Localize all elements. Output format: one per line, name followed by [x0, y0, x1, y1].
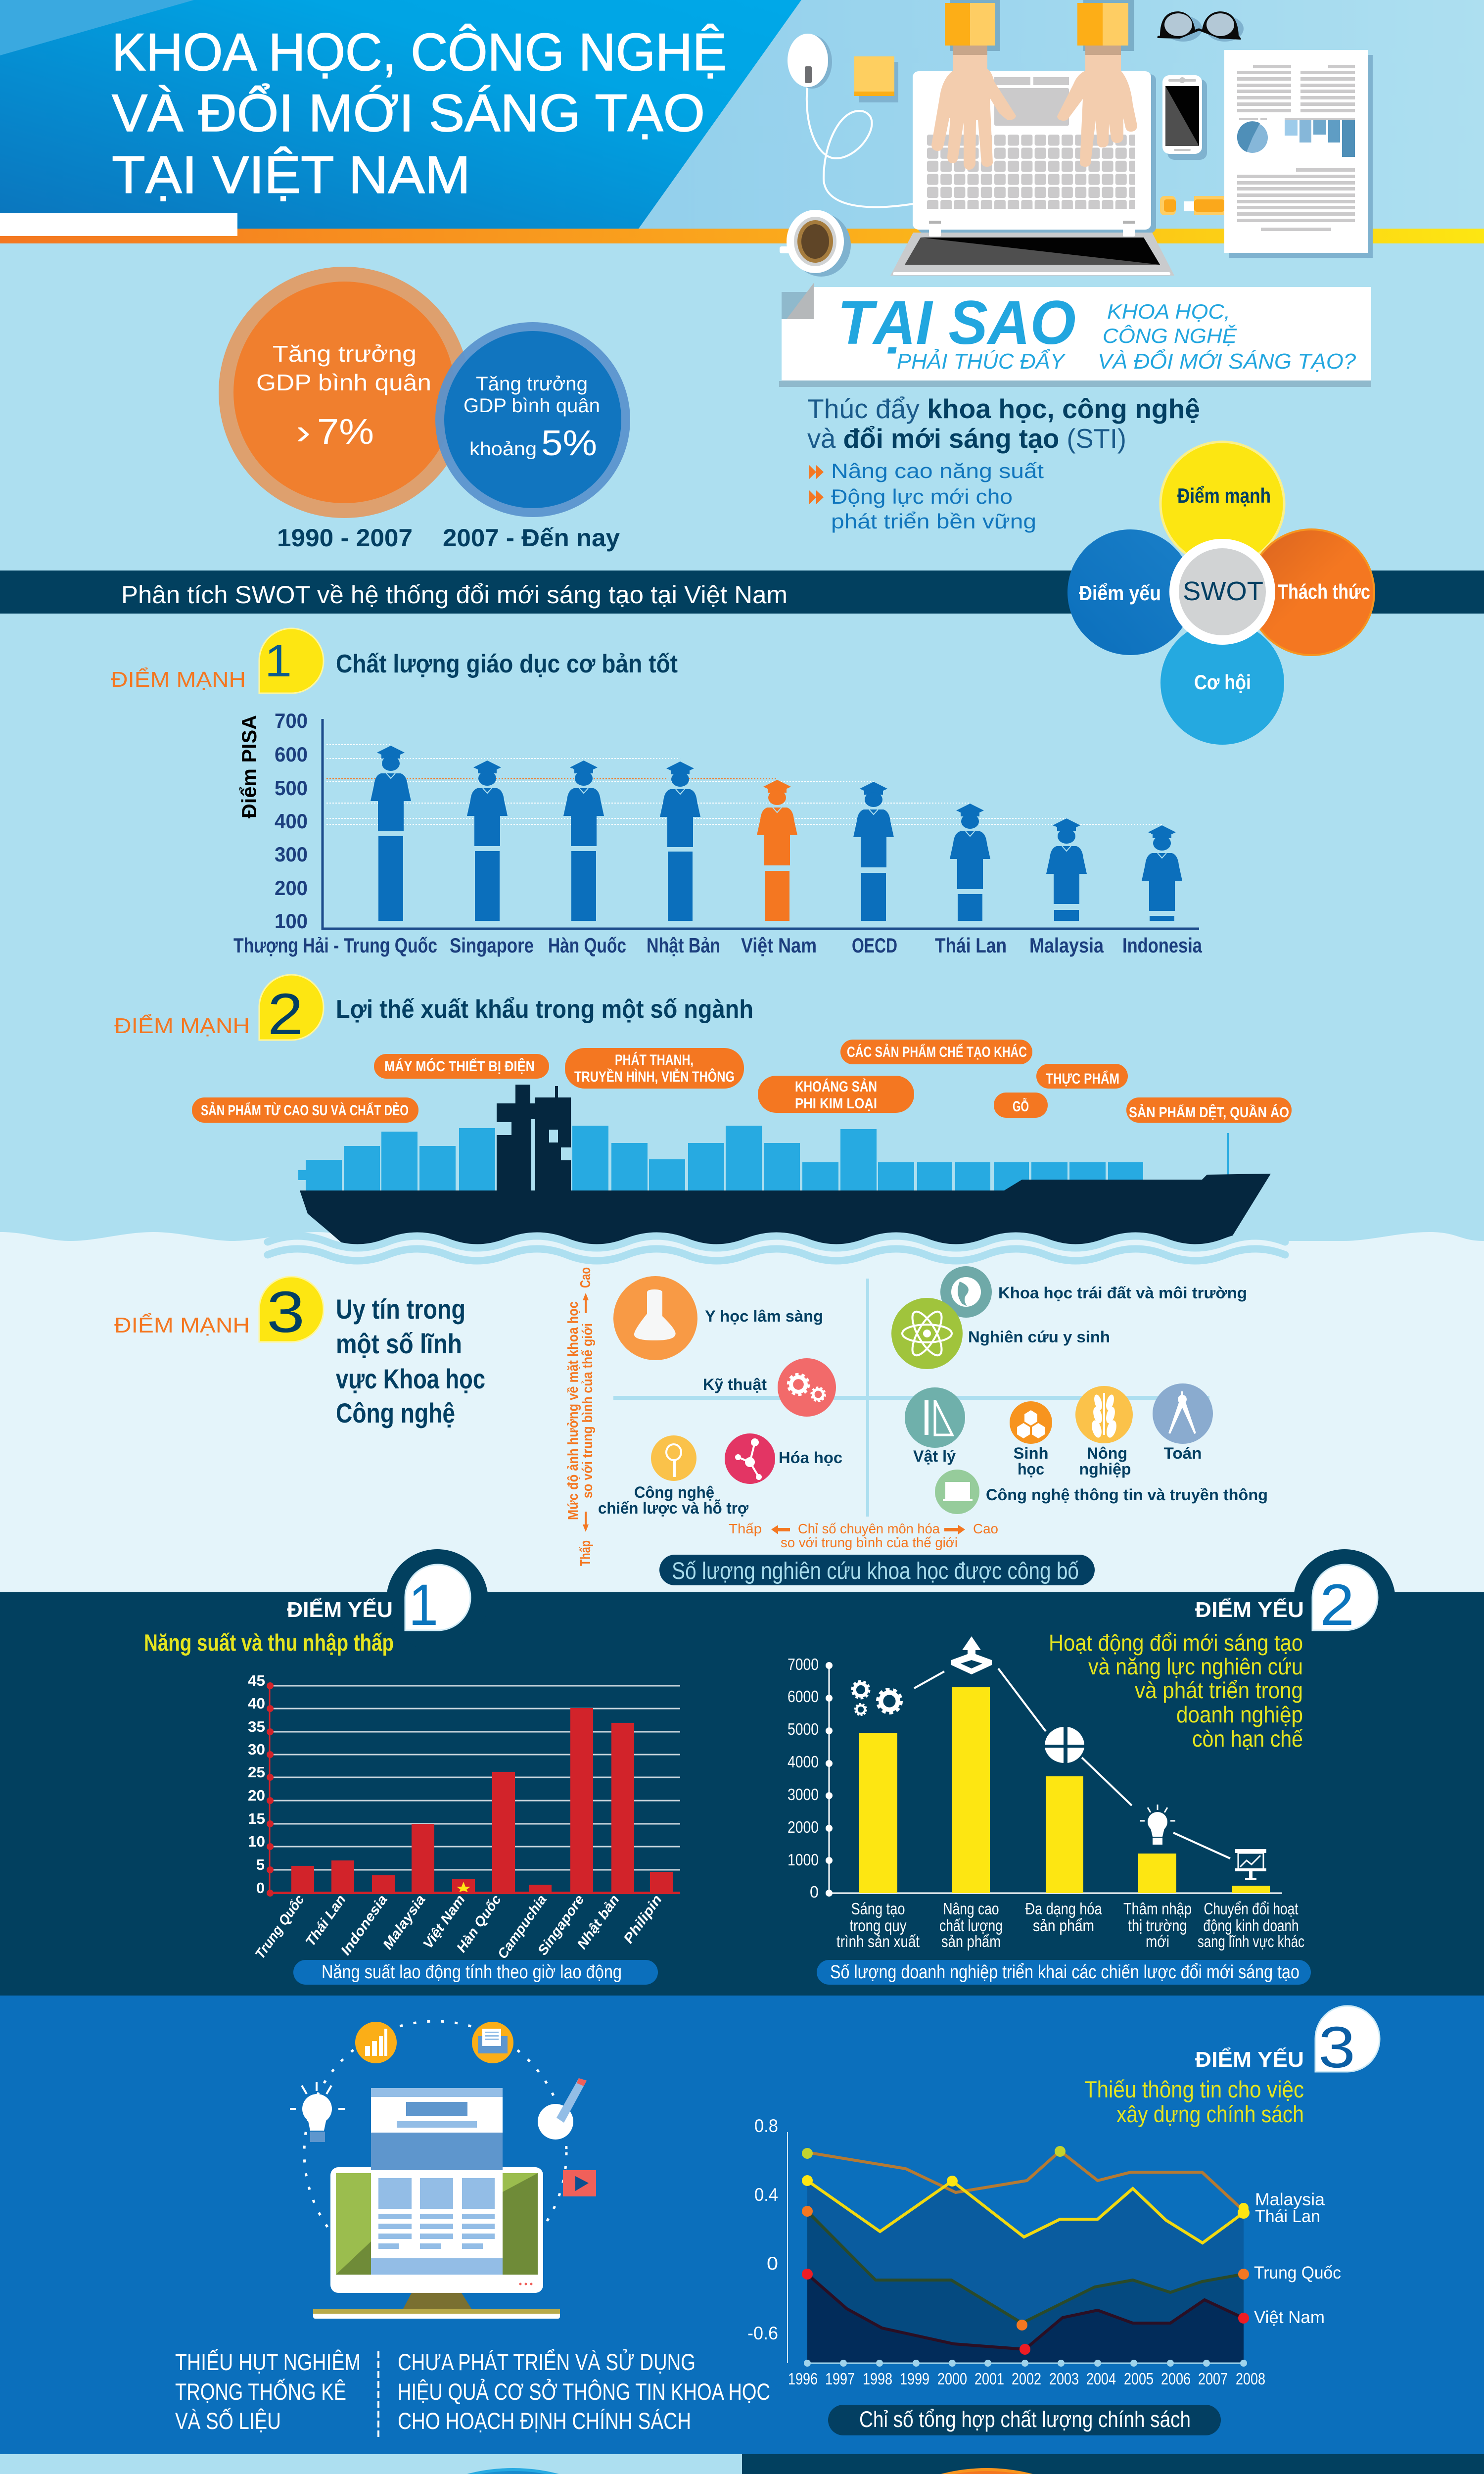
y axis labels: 400 — [275, 809, 308, 833]
badge: weakness 1: ĐIỂM YẾU — [287, 1597, 393, 1622]
list: STI benefits: Động lực mới cho — [831, 485, 1013, 508]
icon: play button — [563, 2170, 596, 2196]
left hand — [931, 3, 1016, 170]
x axis labels: Indonesia — [1122, 934, 1203, 957]
item: physics — [905, 1387, 965, 1465]
icon: light bulb — [290, 2082, 345, 2142]
y axis labels: 5000 — [788, 1720, 819, 1738]
vertical axis label: Mức độ ảnh hưởng về mặt khoa học — [565, 1301, 581, 1520]
x axis labels: Chuyển đổi hoạt — [1204, 1900, 1298, 1918]
badge: weakness 3: ĐIỂM YẾU — [1195, 2046, 1304, 2072]
series labels: Trung Quốc — [1254, 2263, 1341, 2283]
y axis labels: 7000 — [788, 1655, 819, 1673]
quadrant axes — [613, 1396, 1209, 1400]
x axis labels: Nhật bản — [574, 1892, 622, 1952]
water waves — [268, 1236, 1285, 1261]
icon: computer mouse and cord — [788, 34, 913, 207]
line: Thailand — [807, 2181, 1244, 2243]
item: chemistry: Hóa học — [779, 1449, 842, 1467]
x axis labels: trình sản xuất — [836, 1932, 920, 1951]
icon: pie chart — [1045, 1727, 1084, 1763]
data markers — [802, 2146, 1250, 2355]
title: VÀ ĐỔI MỚI SÁNG TẠO — [112, 83, 705, 143]
icon: hands on keyboard — [931, 0, 1137, 170]
circle: GDP 2007 to now: 5% — [541, 424, 597, 463]
item: clinical medicine: Y học lâm sàng — [705, 1307, 823, 1325]
callout: why box: CÔNG NGHỆ — [1103, 324, 1237, 347]
horizontal axis label: Chỉ số chuyên môn hóa — [798, 1521, 940, 1536]
chart: research quadrant — [565, 1266, 1268, 1585]
x axis labels: Campuchia — [494, 1892, 550, 1961]
icon: sticky note — [854, 56, 898, 102]
axes — [829, 1663, 1282, 1893]
circle: GDP 1990-2007: › — [296, 412, 311, 452]
text block: weak statistics: TRỌNG THỐNG KÊ — [175, 2379, 346, 2405]
callouts: export sectors: MÁY MÓC THIẾT BỊ ĐIỆN — [384, 1058, 535, 1075]
item: agriculture — [1075, 1386, 1133, 1478]
x axis labels: 2004 — [1086, 2370, 1116, 2388]
item: strategic technology: Công nghệ — [634, 1483, 714, 1501]
circle: GDP 1990-2007: GDP bình quân — [256, 370, 431, 395]
x axis labels: 2000 — [937, 2370, 967, 2388]
callouts: export sectors: KHOÁNG SẢN — [795, 1078, 877, 1095]
section: weakness 3 — [0, 1996, 1484, 2454]
x axis labels — [836, 1900, 1304, 1951]
heading: strength 2 — [114, 975, 753, 1047]
y axis labels: 500 — [275, 776, 308, 800]
label: periods — [277, 524, 620, 552]
circle: GDP 2007 to now — [435, 322, 630, 517]
text block: promote STI: và đổi mới sáng tạo (STI) — [807, 423, 1126, 454]
x axis labels: Singapore — [535, 1892, 587, 1958]
circle: GDP 1990-2007: 7% — [317, 412, 374, 452]
icon: smartphone — [1162, 75, 1207, 160]
pill: productivity caption: Năng suất lao động tính theo giờ lao động — [322, 1962, 622, 1983]
GDP growth circles — [219, 267, 630, 552]
header accent bar — [0, 229, 1484, 243]
x axis labels: Thâm nhập — [1123, 1900, 1192, 1918]
item: mathematics — [1153, 1383, 1213, 1462]
x axis labels: chất lượng — [939, 1916, 1003, 1935]
monitor — [313, 2088, 560, 2319]
containers — [298, 1126, 1143, 1192]
y axis labels: 4000 — [788, 1753, 819, 1771]
subheading: innovation activities: doanh nghiệp — [1176, 1702, 1303, 1727]
text block: weak statistics: THIẾU HỤT NGHIÊM — [175, 2349, 361, 2375]
circle: opportunities list — [344, 2470, 682, 2474]
y axis labels: 600 — [275, 743, 308, 766]
item: mathematics: Toán — [1163, 1444, 1202, 1462]
list: STI benefits — [809, 459, 1044, 533]
callout: why box — [777, 283, 1371, 387]
subheading: innovation activities: và năng lực nghiên cứu — [1088, 1654, 1303, 1679]
subheading: missing policy information: xây dựng chính sách — [1116, 2101, 1304, 2127]
line: China — [807, 2211, 1244, 2323]
icon: box with arrow — [951, 1636, 992, 1674]
y axis labels: 0 — [256, 1879, 265, 1897]
ship bridge tower — [497, 1085, 571, 1190]
y axis labels: 0.8 — [754, 2116, 778, 2136]
line chart: policy quality — [747, 2116, 1341, 2388]
subheading: innovation activities: Hoạt động đổi mới sáng tạo — [1049, 1630, 1303, 1656]
item: strategic technology: chiến lược và hỗ trợ — [598, 1499, 748, 1517]
badge: weakness 2 — [1195, 1549, 1395, 1651]
heading: strength 2: Lợi thế xuất khẩu trong một số ngành — [336, 995, 753, 1024]
heading: strength 3 — [114, 1277, 485, 1428]
text block: science databases: CHO HOẠCH ĐỊNH CHÍNH SÁCH — [398, 2408, 691, 2434]
item: engineering — [703, 1358, 836, 1417]
item: clinical medicine — [613, 1276, 823, 1360]
heading: strength 2: ĐIỂM MẠNH — [114, 1013, 250, 1038]
y axis labels: 0 — [767, 2253, 778, 2274]
x axis labels: 2001 — [974, 2370, 1004, 2388]
x axis labels: Malaysia — [1029, 934, 1104, 957]
circle: GDP 2007 to now: khoảng — [469, 439, 537, 460]
item: ICT: Công nghệ thông tin và truyền thông — [986, 1486, 1268, 1504]
callout: why box: TẠI SAO — [837, 288, 1076, 357]
icon: Vietnam star — [457, 1882, 470, 1892]
callouts: export sectors: GỖ — [1013, 1098, 1029, 1115]
x axis labels: 1999 — [900, 2370, 929, 2388]
horizontal axis label — [729, 1521, 998, 1550]
x axis labels: sang lĩnh vực khác — [1198, 1932, 1304, 1951]
list: STI benefits: phát triển bền vững — [831, 510, 1036, 533]
chart: PISA scores — [233, 709, 1203, 957]
icon: light bulb — [1140, 1805, 1175, 1845]
heading: strength 3: ĐIỂM MẠNH — [114, 1312, 250, 1337]
right hand — [1057, 3, 1137, 167]
y axis labels: 35 — [248, 1718, 265, 1735]
bar chart: firms by innovation strategy — [788, 1636, 1304, 1951]
heading: strength 1 — [111, 628, 678, 693]
heading: strength 2: 2 — [268, 982, 303, 1047]
bars — [859, 1687, 1270, 1893]
panel background — [0, 2454, 742, 2474]
item: earth science: Khoa học trái đất và môi trường — [998, 1284, 1247, 1302]
horizontal axis label: Thấp — [729, 1521, 762, 1536]
icon: glasses — [1158, 11, 1244, 42]
vertical axis label: Cao — [578, 1267, 594, 1288]
text block: weak statistics: VÀ SỐ LIỆU — [175, 2408, 281, 2434]
x axis labels: 2005 — [1124, 2370, 1154, 2388]
y axis labels — [275, 709, 308, 933]
y axis labels — [788, 1655, 819, 1901]
x axis labels: 1996 — [788, 2370, 818, 2388]
y axis labels: 25 — [248, 1763, 265, 1781]
axes — [322, 719, 1199, 930]
dashed orbit — [304, 2021, 566, 2284]
circle: GDP 1990-2007 — [219, 267, 470, 518]
horizontal axis label: so với trung bình của thế giới — [781, 1535, 958, 1550]
bars and graduates — [371, 746, 1182, 921]
sea background — [0, 1232, 1484, 1598]
series labels: Việt Nam — [1254, 2308, 1325, 2327]
x axis labels: Sáng tạo — [851, 1900, 905, 1918]
y axis labels: 15 — [248, 1810, 265, 1827]
y axis labels: 0 — [810, 1883, 819, 1901]
y axis labels: 200 — [275, 876, 308, 900]
line: Malaysia — [807, 2151, 1244, 2211]
subheading: missing policy information: Thiếu thông tin cho việc — [1084, 2076, 1304, 2102]
y axis labels — [248, 1672, 265, 1897]
dotted reference lines — [326, 745, 1162, 824]
x axis labels — [788, 2370, 1265, 2388]
y axis labels: 2000 — [788, 1818, 819, 1836]
badge: weakness 3: 3 — [1318, 2015, 1355, 2080]
subheading: innovation activities: còn hạn chế — [1192, 1726, 1303, 1752]
dashed divider — [377, 2351, 379, 2437]
area: China — [807, 2211, 1244, 2363]
shadows of sleeves — [950, 0, 1000, 51]
item: ICT — [935, 1470, 1268, 1514]
list: STI benefits: Nâng cao năng suất — [831, 459, 1044, 482]
callouts: export sectors: SẢN PHẨM TỪ CAO SU VÀ CHẤT DẺO — [201, 1102, 409, 1119]
y axis labels — [747, 2116, 778, 2343]
text block: promote STI — [807, 393, 1200, 454]
text block: science databases: HIỆU QUẢ CƠ SỞ THÔNG TIN KHOA HỌC — [398, 2379, 770, 2405]
heading: strength 3: một số lĩnh — [336, 1328, 462, 1359]
x axis labels: trong quy — [850, 1916, 907, 1935]
area: Thailand — [807, 2181, 1244, 2363]
subheading: innovation activities: và phát triển trong — [1135, 1677, 1303, 1703]
heading: strength 3: Công nghệ — [336, 1397, 455, 1428]
item: chemistry — [725, 1433, 842, 1484]
vertical axis label: so với trung bình của thế giới — [580, 1323, 596, 1498]
y axis labels: 6000 — [788, 1687, 819, 1706]
item: biomedical research — [891, 1298, 1110, 1369]
bars — [270, 1708, 680, 1894]
circle: GDP 2007 to now: GDP bình quân — [464, 395, 600, 417]
pill: policy caption: Chỉ số tổng hợp chất lượng chính sách — [859, 2407, 1191, 2432]
x axis labels: Thái Lan — [935, 934, 1007, 957]
circle: challenges list — [818, 2470, 1156, 2474]
y axis labels: 100 — [275, 909, 308, 933]
y axis — [787, 2132, 788, 2363]
connector lines — [914, 1668, 1230, 1858]
x axis labels: mới — [1146, 1932, 1169, 1951]
pill: chart caption: Số lượng nghiên cứu khoa học được công bố — [672, 1558, 1079, 1584]
diagram: SWOT flower: Điểm yếu — [1079, 581, 1161, 605]
icon: laptop — [890, 71, 1174, 276]
callouts: export sectors: THỰC PHẨM — [1046, 1070, 1119, 1087]
icon: coffee cup — [780, 210, 851, 277]
line: Vietnam — [807, 2274, 1244, 2349]
callouts: export sectors: SẢN PHẨM DỆT, QUẦN ÁO — [1129, 1104, 1289, 1121]
badge: weakness 3 — [1195, 2006, 1380, 2080]
callouts: export sectors: TRUYỀN HÌNH, VIỄN THÔNG — [574, 1068, 735, 1085]
x axis labels: thị trường — [1128, 1916, 1187, 1935]
x axis labels: 2003 — [1049, 2370, 1079, 2388]
section background: top header — [0, 0, 1484, 243]
x axis labels: Việt Nam — [420, 1892, 468, 1951]
text block: science databases — [398, 2349, 770, 2434]
icon: USB stick — [1160, 196, 1230, 215]
x axis labels: sản phẩm — [1033, 1916, 1094, 1935]
callouts: export sectors — [192, 1040, 1292, 1123]
y axis labels: -0.6 — [747, 2323, 778, 2343]
panel: opportunities — [0, 2454, 742, 2474]
x axis labels: Việt Nam — [741, 934, 817, 957]
grid lines — [273, 1686, 680, 1870]
y axis labels: 3000 — [788, 1785, 819, 1804]
x axis labels: 1998 — [863, 2370, 892, 2388]
ship with containers — [268, 1085, 1285, 1286]
x axis labels: OECD — [852, 934, 897, 957]
x axis labels: Philipin — [620, 1892, 665, 1946]
series labels: Malaysia — [1255, 2190, 1325, 2209]
section: weaknesses 1 and 2 — [0, 1549, 1484, 1996]
item: biology — [1010, 1401, 1052, 1478]
y axis labels: 45 — [248, 1672, 265, 1689]
item: biology: học — [1018, 1460, 1044, 1478]
series labels: Thái Lan — [1255, 2207, 1320, 2226]
item: biology: Sinh — [1013, 1444, 1049, 1462]
callout: why box: VÀ ĐỔI MỚI SÁNG TẠO? — [1098, 348, 1356, 374]
title: TẠI VIỆT NAM — [112, 145, 470, 204]
y axis — [269, 1685, 270, 1893]
y axis labels: 10 — [248, 1833, 265, 1850]
icon: orange bar chart circle — [355, 2022, 397, 2063]
y axis labels: 30 — [248, 1741, 265, 1758]
x axis labels — [233, 934, 1203, 957]
x axis labels: Nâng cao — [943, 1900, 999, 1918]
circle: GDP 1990-2007: Tăng trưởng — [273, 341, 417, 367]
heading: strength 3: 3 — [267, 1280, 305, 1345]
item: engineering: Kỹ thuật — [703, 1376, 767, 1393]
header panel — [0, 0, 801, 236]
heading: strength 1: 1 — [265, 636, 292, 686]
badge: weakness 2: 2 — [1320, 1572, 1354, 1638]
x axis labels: Malaysia — [380, 1892, 428, 1952]
x axis labels: động kinh doanh — [1203, 1916, 1299, 1935]
item: agriculture: Nông — [1087, 1444, 1127, 1462]
y axis labels: 40 — [248, 1695, 265, 1712]
x axis labels: 2008 — [1236, 2370, 1265, 2388]
y axis labels: 300 — [275, 843, 308, 866]
callout: why box: KHOA HỌC, — [1107, 300, 1230, 323]
x axis labels: Trung Quốc — [252, 1892, 307, 1961]
y axis labels: 20 — [248, 1787, 265, 1804]
y axis title: Điểm PISA — [237, 715, 261, 818]
item: strategic technology — [598, 1435, 748, 1517]
callouts: export sectors: PHI KIM LOẠI — [795, 1095, 877, 1112]
item: biomedical research: Nghiên cứu y sinh — [968, 1328, 1110, 1346]
x axis labels: Đa dạng hóa — [1025, 1900, 1102, 1918]
icon: orange envelope circle — [472, 2022, 513, 2063]
x axis labels: Hàn Quốc — [548, 934, 626, 957]
text block: promote STI: Thúc đẩy khoa học, công nghệ — [807, 393, 1200, 424]
badge: weakness 2: ĐIỂM YẾU — [1195, 1597, 1304, 1622]
y axis labels: 5 — [256, 1856, 265, 1873]
section background — [0, 1592, 1484, 1996]
x axis labels: Thượng Hải - Trung Quốc — [233, 934, 437, 957]
x axis labels: Thái Lan — [302, 1892, 349, 1949]
badge: weakness 1: 1 — [409, 1572, 438, 1638]
pill: firms caption: Số lượng doanh nghiệp triển khai các chiến lược đổi mới sáng tạo — [830, 1962, 1299, 1983]
diagram: SWOT flower: Cơ hội — [1194, 670, 1251, 694]
heading: strength 3: vực Khoa học — [336, 1363, 485, 1394]
icon: document report — [1224, 50, 1373, 258]
x axis labels: Singapore — [450, 934, 534, 957]
vertical axis label — [565, 1267, 596, 1566]
baseline and ticks — [804, 2360, 1247, 2367]
circle: GDP 2007 to now: Tăng trưởng — [476, 373, 588, 395]
x axis labels: Indonesia — [338, 1892, 390, 1958]
x axis labels: 2002 — [1012, 2370, 1041, 2388]
icon: pencil on circle — [538, 2078, 587, 2140]
series labels — [1254, 2190, 1341, 2327]
text block: weak statistics — [175, 2349, 361, 2434]
y axis labels: 700 — [275, 709, 308, 732]
item: physics: Vật lý — [913, 1447, 956, 1465]
callouts: export sectors: CÁC SẢN PHẨM CHẾ TẠO KHÁC — [847, 1044, 1027, 1060]
text block: science databases: CHƯA PHÁT TRIỂN VÀ SỬ DỤNG — [398, 2349, 696, 2375]
subheading: innovation activities — [1049, 1630, 1303, 1752]
heading: strength 1: Chất lượng giáo dục cơ bản tốt — [336, 650, 678, 678]
x axis labels: 2006 — [1161, 2370, 1191, 2388]
x axis labels: Hàn Quốc — [454, 1892, 504, 1955]
area: Vietnam — [807, 2274, 1244, 2363]
vertical axis label: Thấp — [578, 1540, 594, 1566]
horizontal axis label: Cao — [973, 1521, 998, 1536]
section background — [0, 1996, 1484, 2454]
x axis labels: Nhật Bản — [647, 934, 720, 957]
panel background — [742, 2454, 1484, 2474]
title: KHOA HỌC, CÔNG NGHỆ — [112, 22, 727, 82]
diagram: SWOT flower — [1067, 442, 1374, 745]
section background: light blue — [0, 243, 1484, 1283]
subheading: missing policy information — [1084, 2076, 1304, 2127]
x axis labels: sản phẩm — [941, 1932, 1001, 1951]
label: periods: 2007 - Đến nay — [443, 524, 620, 552]
diagram: SWOT flower: Điểm mạnh — [1177, 484, 1271, 507]
title — [112, 22, 727, 204]
diagram: SWOT flower: Thách thức — [1278, 580, 1370, 603]
x axis labels: 2007 — [1198, 2370, 1228, 2388]
icon: chart frame — [1235, 1849, 1266, 1880]
label: periods: 1990 - 2007 — [277, 524, 413, 552]
bar chart: labour productivity — [248, 1672, 680, 1961]
water cover — [268, 1236, 1285, 1286]
illustration: monitor and ideas — [290, 2021, 596, 2319]
diagram: SWOT flower: SWOT — [1183, 576, 1263, 606]
hull — [300, 1174, 1271, 1252]
x axis labels — [252, 1892, 665, 1961]
y axis labels: 1000 — [788, 1851, 819, 1869]
icon: gears — [852, 1681, 901, 1715]
callouts: export sectors: PHÁT THANH, — [615, 1051, 694, 1068]
panel: challenges — [742, 2454, 1484, 2474]
y axis labels: 0.4 — [754, 2185, 778, 2205]
x axis labels: 1997 — [825, 2370, 855, 2388]
item: earth science — [940, 1266, 1247, 1318]
heading: strength 3: Uy tín trong — [336, 1293, 465, 1325]
desk illustration — [780, 0, 1373, 277]
heading: strength 1: ĐIỂM MẠNH — [111, 666, 246, 692]
badge: weakness 1 — [287, 1549, 488, 1651]
item: agriculture: nghiệp — [1079, 1460, 1131, 1478]
mast — [1227, 1133, 1229, 1178]
band: SWOT heading: Phân tích SWOT về hệ thống đổi mới sáng tạo tại Việt Nam — [121, 581, 788, 609]
callout: why box: PHẢI THÚC ĐẨY — [897, 348, 1066, 374]
band: SWOT heading — [0, 571, 1484, 614]
subheading: low productivity: Năng suất và thu nhập thấp — [144, 1629, 394, 1656]
